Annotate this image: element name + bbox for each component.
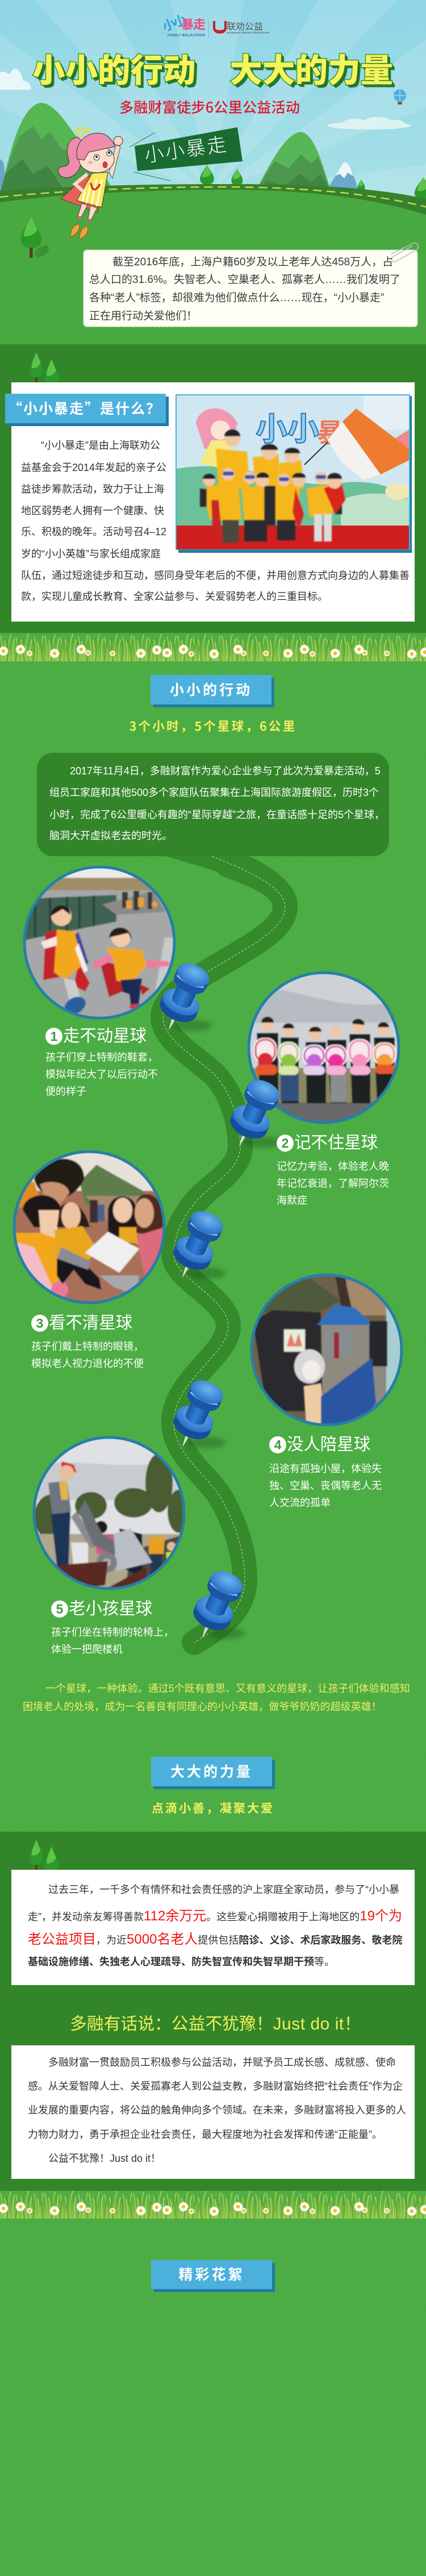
planet 2 text (277, 1133, 389, 1206)
trees above panel (30, 352, 59, 394)
planet 4 description: 独、空巢、丧偶等老人无 (269, 1480, 382, 1491)
planet 1 title: 1 (51, 1029, 57, 1044)
yellow summary (23, 1679, 426, 1716)
women on right (108, 1197, 136, 1244)
dark panel text: 脑洞大开虚拟老去的时光。 (49, 830, 172, 841)
dark panel text: 组员工家庭和其他500多个家庭队伍聚集在上海国际旅游度假区，历时3个 (49, 787, 379, 798)
tree on lawn (21, 216, 51, 260)
grandma cutout (294, 1349, 325, 1383)
planet 1 description: 便的样子 (45, 1086, 86, 1097)
planet 4 description: 沿途有孤独小屋，体验失 (269, 1463, 382, 1474)
planet 3 text (31, 1313, 151, 1373)
statement text: 业发展的重要内容，将公益的触角伸向多个领域。在未来，多融财富将投入更多的人 (28, 2104, 406, 2116)
kid left (43, 929, 59, 980)
road winding through the planets (163, 856, 298, 1643)
heading: big power (151, 1757, 272, 1786)
centre girl (57, 1203, 90, 1227)
raised arm and fist (109, 136, 123, 178)
heading: little action: 小小的行动 (170, 679, 252, 699)
yellow summary: 一个星球，一种体验。通过5个既有意思、又有意义的星球，让孩子们体验和感知 (45, 1683, 410, 1694)
dark rounded intro panel (37, 753, 389, 856)
pink tent and cloud (385, 429, 410, 500)
results text (28, 1878, 414, 1974)
statement text: 感。从关爱智障人士、关爱孤寡老人到公益支教，多融财富始终把“社会责任”作为企 (28, 2081, 403, 2092)
photo: walk planet (24, 866, 176, 1020)
statement text: 多融财富一贯鼓励员工积极参与公益活动，并赋予员工成长感、成就感、使命 (48, 2057, 396, 2068)
heading: statement: 多融有话说：公益不犹豫！Just do it！ (70, 2010, 361, 2035)
dark panel text (49, 765, 385, 841)
grass strip 1 (0, 633, 426, 661)
note card background (83, 250, 417, 327)
title: 小小的行动 大大的力量 (32, 44, 393, 91)
planet 5 title: 5 (56, 1602, 63, 1616)
right hill (254, 132, 332, 193)
bow (77, 128, 91, 136)
results text: 过去三年，一千多个有情怀和社会责任感的沪上家庭全家动员，参与了“小小暴 (48, 1884, 399, 1895)
planet 2 title: 2 (282, 1136, 289, 1151)
results text: 老公益项目，为近5000名老人提供包括陪诊、义诊、术后家政服务、敬老院 (28, 1932, 402, 1947)
note card text: 各种“老人”标签，却很难为他们做点什么……现在，“小小暴走” (89, 292, 384, 304)
photo: memory planet (248, 972, 400, 1125)
logo: little walk (159, 9, 206, 37)
intro text: 益基金会于2014年发起的亲子公 (21, 462, 166, 473)
hair ponytail (59, 137, 83, 178)
planet 4 description (269, 1460, 389, 1511)
statement text: 力物力财力，勇于承担企业社会责任，最大程度地为社会发挥和传递“正能量”。 (28, 2129, 382, 2140)
logo divider (208, 20, 209, 37)
planet 3 title: 3 (36, 1316, 43, 1331)
legs (78, 203, 97, 220)
note card text: 截至2016年底，上海户籍60岁及以上老年人达458万人，占 (112, 256, 393, 268)
green sign: 小小暴走 (143, 128, 229, 168)
pushpin 4 (165, 1375, 228, 1455)
planet 5 description: 孩子们坐在特制的轮椅上， (51, 1627, 174, 1638)
planet 4 text (269, 1435, 389, 1511)
intro text: 岁的“小小英雄”与家长组成家庭 (21, 548, 161, 560)
planet 5 text (51, 1599, 170, 1658)
photo: child planet (33, 1437, 190, 1597)
photo: group on stage: 暴 (317, 412, 343, 450)
backdrop lettering: 小小 (256, 404, 319, 450)
pushpin 3 (165, 1206, 228, 1286)
dark panel text: 2017年11月4日，多融财富作为爱心企业参与了此次为爱暴走活动，5 (70, 765, 381, 777)
intro text: 队伍，通过短途徒步和互动，感同身受年老后的不便，并用创意方式向身边的人募集善 (21, 570, 410, 581)
cloud right (327, 117, 411, 130)
subtitle: 多融财富徒步6公里公益活动 (119, 97, 300, 117)
grass strip 2 (0, 2190, 426, 2219)
blue banner (321, 1358, 376, 1427)
small trees behind the road (200, 165, 426, 206)
orange flag (304, 409, 409, 480)
cartoon girl on backdrop (196, 409, 237, 469)
logo group (159, 9, 270, 37)
results text: 基础设施修缮、失独老人心理疏导、防失智宣传和失智早期干预等。 (28, 1956, 335, 1968)
lawn ground (0, 187, 426, 344)
kid right (99, 960, 123, 997)
planet 5 title: 老小孩星球 (69, 1599, 152, 1618)
apron dress (77, 172, 108, 207)
wooden table (56, 1561, 108, 1591)
subheading: small deeds: 点滴小善，凝聚大爱 (152, 1799, 274, 1816)
cloud left (0, 69, 31, 90)
planet 2 description: 年记忆衰退，了解阿尔茨 (277, 1178, 389, 1189)
planet 2 description (277, 1158, 396, 1209)
character: hero girl (59, 128, 123, 239)
planet 2 description: 海默症 (277, 1195, 307, 1206)
white panel (11, 382, 415, 622)
intro text (21, 440, 410, 602)
face (79, 145, 114, 173)
planet 3 description: 模拟老人视力退化的不便 (31, 1358, 144, 1369)
logo: little walk: 小小 (159, 9, 187, 35)
note card text (89, 256, 400, 322)
section background: what is it (0, 344, 426, 633)
planet 1 title: 走不动星球 (63, 1027, 147, 1045)
subheading: 3 hours 5 planets 6 km: 3个小时，5个星球，6公里 (130, 717, 296, 735)
heading: highlights: 精彩花絮 (178, 2264, 244, 2284)
white panel: results (11, 1870, 415, 1985)
planet 3 title: 看不清星球 (49, 1314, 132, 1332)
trees above panel (30, 1840, 59, 1882)
man leaning (34, 1158, 84, 1199)
yellow summary: 困境老人的处境，成为一名善良有同理心的小小英雄，做爷爷奶奶的超级英雄！ (23, 1701, 382, 1712)
heading: what is it: “小小暴走”是什么？ (8, 398, 161, 418)
statement text (28, 2050, 414, 2171)
road band (0, 184, 426, 227)
intro text: 益徒步筹款活动，致力于让上海 (21, 483, 164, 495)
icon: paperclip (391, 243, 418, 262)
intro text: 款，实现儿童成长教育、全家公益参与、关爱弱势老人的三重目标。 (21, 591, 328, 602)
photo: group on stage (176, 394, 412, 553)
planet 4 title: 4 (274, 1437, 281, 1452)
results text: 走”，并发动亲友筹得善款112余万元。这些爱心捐赠被用于上海地区的19个为 (28, 1908, 402, 1924)
crowd (71, 1543, 88, 1569)
planet 2 description: 记忆力考验，体验老人晚 (277, 1161, 389, 1172)
cape (61, 174, 99, 212)
intro text: “小小暴走”是由上海联劝公 (41, 440, 160, 451)
intro text: 乐、积极的晚年。活动号召4–12 (21, 526, 166, 537)
icon: hot air balloon (394, 89, 406, 105)
photo: lonely planet (252, 1274, 403, 1432)
heading: what is it (5, 394, 166, 423)
planet 3 description (31, 1338, 151, 1372)
logo: united foundation: 联劝公益 (227, 19, 263, 32)
planet 4 description: 人交流的孤单 (269, 1497, 331, 1508)
bent arm (75, 174, 87, 192)
green sign (130, 127, 243, 181)
planet 1 description: 孩子们穿上特制的鞋套， (45, 1052, 158, 1063)
hair top (77, 133, 115, 160)
planet 3 description: 孩子们戴上特制的眼镜， (31, 1341, 144, 1352)
planet 5 description (51, 1624, 170, 1658)
left hill (0, 103, 115, 196)
photo: sight planet (14, 1151, 165, 1304)
man with red visor (61, 1461, 77, 1473)
planet 5 description: 体验一把爬楼机 (51, 1644, 123, 1655)
heading: little action (151, 675, 272, 705)
statement text: 公益不犹豫！Just do it！ (48, 2153, 161, 2164)
dark panel text: 小时，完成了6公里暖心有趣的“星际穿越”之旅，在童话感十足的5个星球， (49, 809, 385, 820)
note card text: 正在用行动关爱他们！ (89, 310, 197, 322)
logo: united foundation (213, 19, 270, 34)
planet 2 title: 记不住星球 (294, 1133, 378, 1152)
header sky (0, 0, 426, 344)
rocket flames (70, 224, 88, 239)
pushpin 1 (151, 958, 215, 1038)
heading: highlights (151, 2260, 272, 2289)
pushpin 5 (185, 1566, 248, 1646)
eyes and mouth (88, 151, 111, 168)
logo: little walk: FAMILY WALKATHON (168, 34, 205, 37)
bunny placards (254, 1039, 395, 1066)
worksheet (85, 1232, 139, 1273)
white panel: statement (11, 2045, 415, 2179)
intro text: 地区弱势老人拥有一个健康、快 (21, 505, 164, 516)
snow mountain left (0, 156, 8, 193)
section background: big power (0, 1832, 426, 2191)
lawn noise texture (0, 661, 426, 2576)
note card text: 总人口的31.6%。失智老人、空巢老人、孤寡老人……我们发明了 (89, 274, 400, 286)
snow mountain right (327, 162, 359, 193)
planet 4 title: 没人陪星球 (287, 1435, 370, 1454)
team on stage (200, 430, 345, 543)
planet 1 description (45, 1052, 158, 1097)
planet 1 description: 模拟年纪大了以后行动不 (45, 1069, 158, 1080)
road dashes (0, 187, 426, 207)
pushpin 2 (222, 1074, 285, 1154)
girl with glasses (23, 1195, 61, 1227)
logo: little walk: 暴走 (181, 15, 205, 33)
planet 1 text (45, 1027, 158, 1097)
heading: big power: 大大的力量 (170, 1761, 253, 1781)
logo: united foundation: SHANGHAI UNITED FOUNDATION (227, 31, 270, 34)
stair-climbing wheelchair (71, 1511, 97, 1549)
